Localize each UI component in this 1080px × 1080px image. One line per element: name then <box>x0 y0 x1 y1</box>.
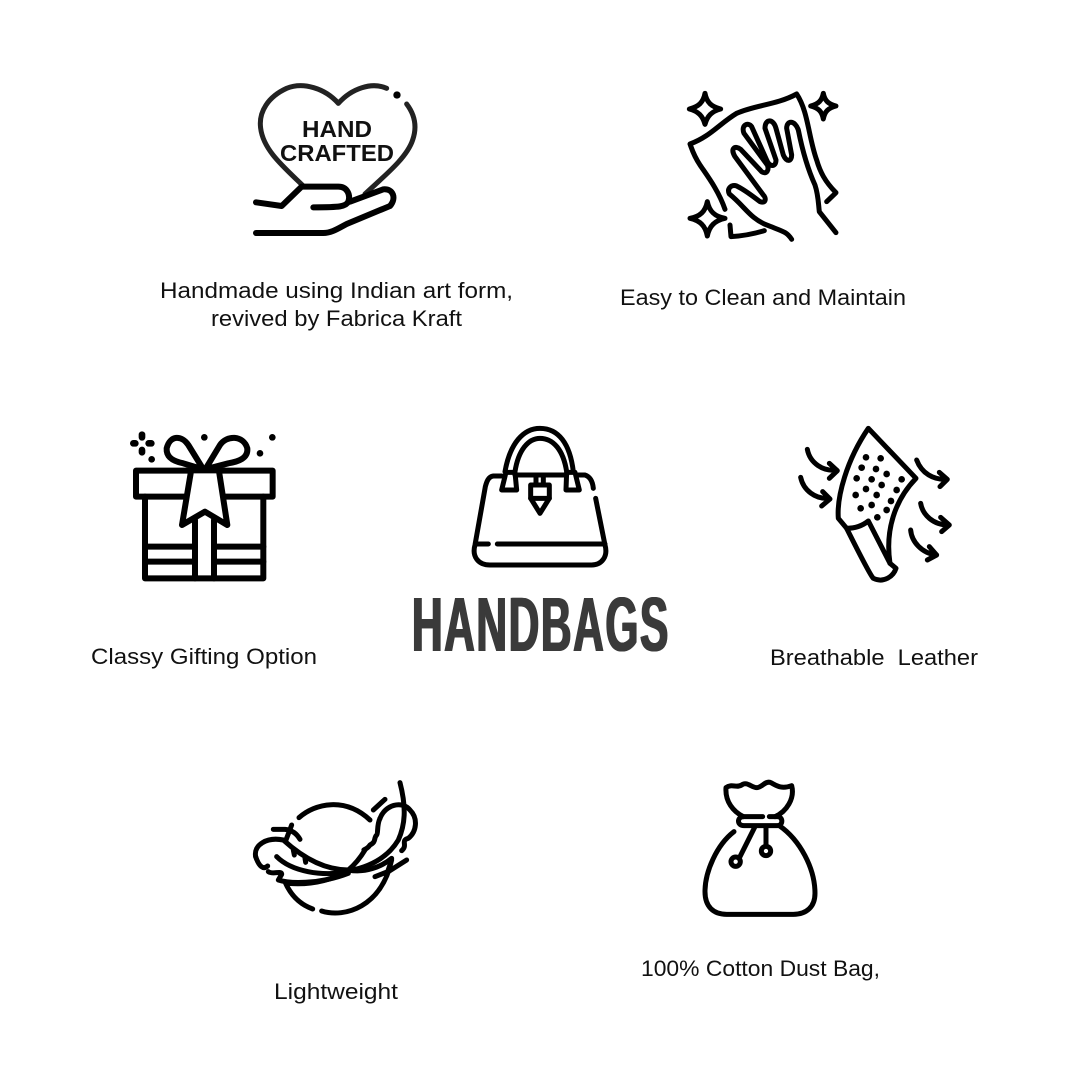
perforation dots <box>852 454 905 521</box>
icon: feathers in circle <box>255 783 415 913</box>
label: handmade: Handmade using Indian art form, <box>160 278 513 303</box>
icon text: HAND CRAFTED <box>280 116 394 166</box>
label: handmade: revived by Fabrica Kraft <box>211 306 462 331</box>
label: breathable leather: Breathable Leather <box>770 645 978 670</box>
panel: dust bag <box>641 782 880 981</box>
heading: HANDBAGS: HANDBAGS <box>412 582 670 668</box>
label: easy to clean: Easy to Clean and Maintain <box>620 285 906 310</box>
label: dust bag: 100% Cotton Dust Bag, <box>641 956 880 981</box>
panel: easy to clean <box>620 93 906 310</box>
icon text: HAND CRAFTED: CRAFTED <box>280 140 394 166</box>
label: gifting: Classy Gifting Option <box>91 644 317 669</box>
icon: handbag <box>474 428 606 565</box>
label: handmade <box>160 278 513 331</box>
icon: hand wiping with cloth <box>689 93 836 239</box>
label: lightweight: Lightweight <box>274 979 398 1004</box>
panel: lightweight <box>255 783 415 1004</box>
panel: handbags centre <box>412 428 682 667</box>
icon: heart on open hand <box>256 86 415 233</box>
icon: drawstring dust bag <box>705 782 815 914</box>
panel: handcrafted <box>160 86 513 331</box>
icon: gift box <box>133 434 276 578</box>
panel: breathable leather <box>770 428 978 670</box>
panel: gifting <box>91 434 317 669</box>
icon: breathable leather piece <box>801 428 949 580</box>
icon text: HAND CRAFTED: HAND <box>302 116 372 142</box>
